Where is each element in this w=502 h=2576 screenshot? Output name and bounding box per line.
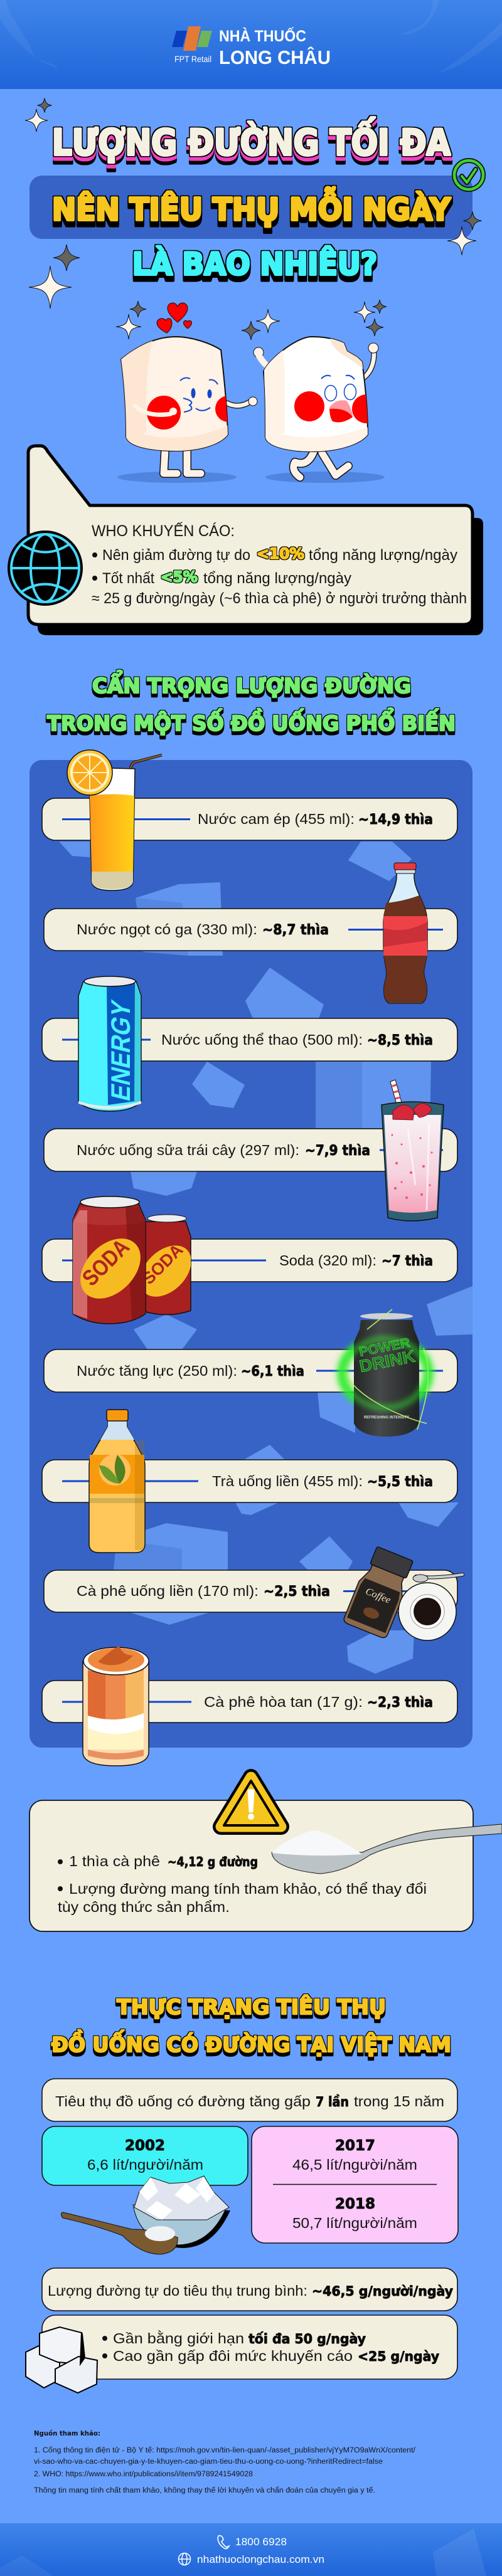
row: fruit milk drink: ~7,9 thìa [305, 1143, 370, 1159]
footer band [0, 2523, 502, 2576]
row: energy drink: Nước tăng lực (250 ml): [77, 1363, 237, 1379]
heading: drinks: TRONG MỘT SỐ ĐỒ UỐNG PHỔ BIẾN [47, 707, 456, 736]
row: soda: Soda (320 ml): [279, 1252, 376, 1269]
heading: drinks: CẨN TRỌNG LƯỢNG ĐƯỜNG [92, 670, 411, 698]
text block: WHO recommendation [92, 522, 467, 607]
icon: globe [8, 531, 83, 606]
icon: spoon with sugar [272, 1824, 502, 1874]
row: soda: ~7 thìa [382, 1254, 433, 1269]
text block: note: tùy công thức sản phẩm. [58, 1899, 230, 1915]
box: 2002: 6,6 lít/người/năm [87, 2156, 203, 2173]
box: 7x growth [42, 2079, 457, 2121]
box: 2017 and 2018 [252, 2126, 458, 2243]
text block: note: 1 thìa cà phê [69, 1853, 160, 1869]
background sugar cubes [59, 842, 473, 1674]
row: soda [42, 1239, 457, 1282]
row: ready to drink coffee: Cà phê uống liền (170 ml): [77, 1583, 259, 1599]
text block: WHO recommendation: <5% [161, 568, 198, 586]
row: orange juice: Nước cam ép (455 ml): [198, 811, 355, 827]
text block: WHO recommendation: WHO KHUYẾN CÁO: [92, 522, 235, 540]
icon: web globe [178, 2553, 191, 2565]
text block: note: Lượng đường mang tính tham khảo, có thể thay đổi [69, 1881, 427, 1897]
icon: sugar cubes [26, 2327, 97, 2393]
icon: warning triangle [221, 1777, 281, 1827]
row: bottled tea: ~5,5 thìa [367, 1474, 433, 1490]
text block: note [58, 1853, 427, 1915]
title line 1: LƯỢNG ĐƯỜNG TỐI ĐA [52, 117, 451, 164]
heading: consumption in Vietnam: ĐỒ UỐNG CÓ ĐƯỜNG TẠI VIỆT NAM [51, 2029, 451, 2057]
panel: note [29, 1777, 502, 1931]
title line 3: LÀ BAO NHIÊU? [132, 245, 377, 282]
logo mark: FPT Retail [172, 26, 212, 64]
box: 2002 [42, 2126, 248, 2185]
row: sports drink [42, 1018, 457, 1061]
logo wordmark: NHÀ THUỐC [219, 26, 306, 45]
box: 2017 and 2018: 50,7 lít/người/năm [292, 2215, 417, 2231]
text block: sources: Thông tin mang tính chất tham khảo, không thay thế lời khuyên và chẩn đoán của chuyên gia y tế. [34, 2487, 375, 2494]
icon: soda cans: SODA [139, 1240, 186, 1288]
icon: coffee jar and cup: Coffee [364, 1586, 392, 1606]
text block: WHO recommendation: Nên giảm đường tự do [102, 547, 250, 564]
text block: WHO recommendation: Tốt nhất [102, 570, 154, 587]
row: sports drink: ~8,5 thìa [367, 1033, 433, 1048]
heading: consumption in Vietnam: THỰC TRẠNG TIÊU THỤ [117, 1994, 386, 2019]
text block: WHO recommendation: tổng năng lượng/ngày [309, 547, 457, 564]
shadows under characters [117, 472, 385, 483]
row: instant coffee: Cà phê hòa tan (17 g): [204, 1694, 363, 1710]
row: energy drink [44, 1349, 457, 1392]
contact: website: nhathuoclongchau.com.vn [197, 2554, 324, 2565]
row: bottled tea [42, 1460, 457, 1502]
box: 2017 and 2018: 46,5 lít/người/năm [292, 2156, 417, 2173]
icon: soda cans [69, 1196, 201, 1324]
text block: sources: vi-sao-who-va-cac-chuyen-gia-y-te-khuyen-cao-giam-tieu-thu-o-uong-co-uong-?inheritRedirect=false [34, 2458, 383, 2466]
icon: energy can with green glow: POWER [358, 1336, 411, 1359]
contact: phone: 1800 6928 [235, 2536, 287, 2548]
box: average free sugar [42, 2268, 457, 2311]
text block: sources: 1. Cổng thông tin điện tử - Bộ Y tế: https://moh.gov.vn/tin-lien-quan/-/asset_publisher/vjYyM7O9aWnX/content/ [34, 2447, 416, 2454]
icon: strawberry milkshake [382, 1080, 444, 1221]
row: ready to drink coffee [44, 1570, 457, 1612]
icon: sugar bowl with wooden spoon [61, 2176, 230, 2254]
text block: sources: Nguồn tham khảo: [34, 2429, 100, 2437]
icon: energy can with green glow [341, 1309, 429, 1437]
icon: soda cans: SODA [77, 1233, 134, 1291]
text block: WHO recommendation: tổng năng lượng/ngày [203, 570, 351, 587]
row: fruit milk drink: Nước uống sữa trái cây (297 ml): [77, 1142, 299, 1158]
header band with logo [0, 0, 502, 89]
box: comparison to limits: <25 g/ngày [358, 2349, 439, 2364]
row: bottled tea: Trà uống liền (455 ml): [212, 1473, 363, 1489]
text block: WHO recommendation: <10% [257, 545, 304, 562]
panel: drinks [29, 760, 473, 1748]
character: right marshmallow [254, 337, 381, 477]
icon: energy can with green glow: REFRESHING INTENSITY [364, 1416, 409, 1420]
icon: hearts [157, 303, 192, 333]
icon: phone [218, 2536, 229, 2548]
row: soft drink: Nước ngọt có ga (330 ml): [77, 921, 257, 937]
text block: note: ~4,12 g đường [168, 1854, 258, 1869]
box: average free sugar: Lượng đường tự do tiêu thụ trung bình: [48, 2283, 307, 2299]
row: soft drink: ~8,7 thìa [262, 922, 329, 938]
box: average free sugar: ~46,5 g/người/ngày [312, 2284, 453, 2299]
icon: cola bottle [383, 863, 427, 1003]
row: orange juice [42, 798, 457, 840]
box: 2017 and 2018: 2018 [335, 2196, 375, 2212]
title band [29, 176, 473, 239]
row: sports drink: Nước uống thể thao (500 ml): [161, 1032, 363, 1048]
box: 2002: 2002 [125, 2138, 165, 2154]
box: 2017 and 2018: 2017 [335, 2138, 375, 2154]
icon: bottled tea [89, 1410, 145, 1553]
character: left marshmallow [121, 337, 257, 473]
row: ready to drink coffee: ~2,5 thìa [264, 1584, 330, 1600]
sparkles [25, 98, 482, 340]
box: 7x growth: trong 15 năm [354, 2093, 444, 2109]
icon: coffee jar and cup [343, 1545, 462, 1640]
icon: energy can: ENERGY [106, 997, 136, 1104]
row: instant coffee [42, 1681, 457, 1723]
heading: drinks [47, 670, 456, 736]
row: energy drink: ~6,1 thìa [241, 1364, 304, 1380]
text block: sources [34, 2429, 416, 2494]
icon: instant coffee cup [83, 1646, 149, 1766]
icon: energy can with green glow: DRINK [358, 1346, 417, 1376]
text block: WHO recommendation: ≈ 25 g đường/ngày (~6 thìa cà phê) ở người trưởng thành [92, 590, 467, 607]
row: fruit milk drink [44, 1129, 457, 1171]
logo wordmark: LONG CHÂU [219, 46, 331, 68]
box: comparison to limits: Cao gần gấp đôi mức khuyến cáo [113, 2348, 353, 2364]
row: orange juice: ~14,9 thìa [358, 812, 433, 828]
box: comparison to limits [42, 2315, 457, 2379]
heading: consumption in Vietnam [51, 1994, 451, 2057]
panel: WHO recommendation bubble [8, 446, 483, 635]
row: soft drink [44, 909, 457, 951]
title line 2: NÊN TIÊU THỤ MỖI NGÀY [52, 186, 451, 228]
box: 7x growth: Tiêu thụ đồ uống có đường tăng gấp [55, 2093, 311, 2109]
box: comparison to limits: Gần bằng giới hạn [113, 2330, 244, 2346]
icon: energy can [78, 976, 141, 1111]
text block: sources: 2. WHO: https://www.who.int/publications/i/item/9789241549028 [34, 2471, 253, 2478]
logo mark: FPT Retail: FPT Retail [174, 55, 211, 64]
box: comparison to limits: tối đa 50 g/ngày [248, 2331, 366, 2346]
icon: green check circle [454, 161, 483, 189]
box: 7x growth: 7 lần [316, 2094, 349, 2109]
icon: orange juice glass [67, 750, 162, 890]
logo wordmark [219, 26, 331, 68]
row: instant coffee: ~2,3 thìa [367, 1695, 433, 1711]
